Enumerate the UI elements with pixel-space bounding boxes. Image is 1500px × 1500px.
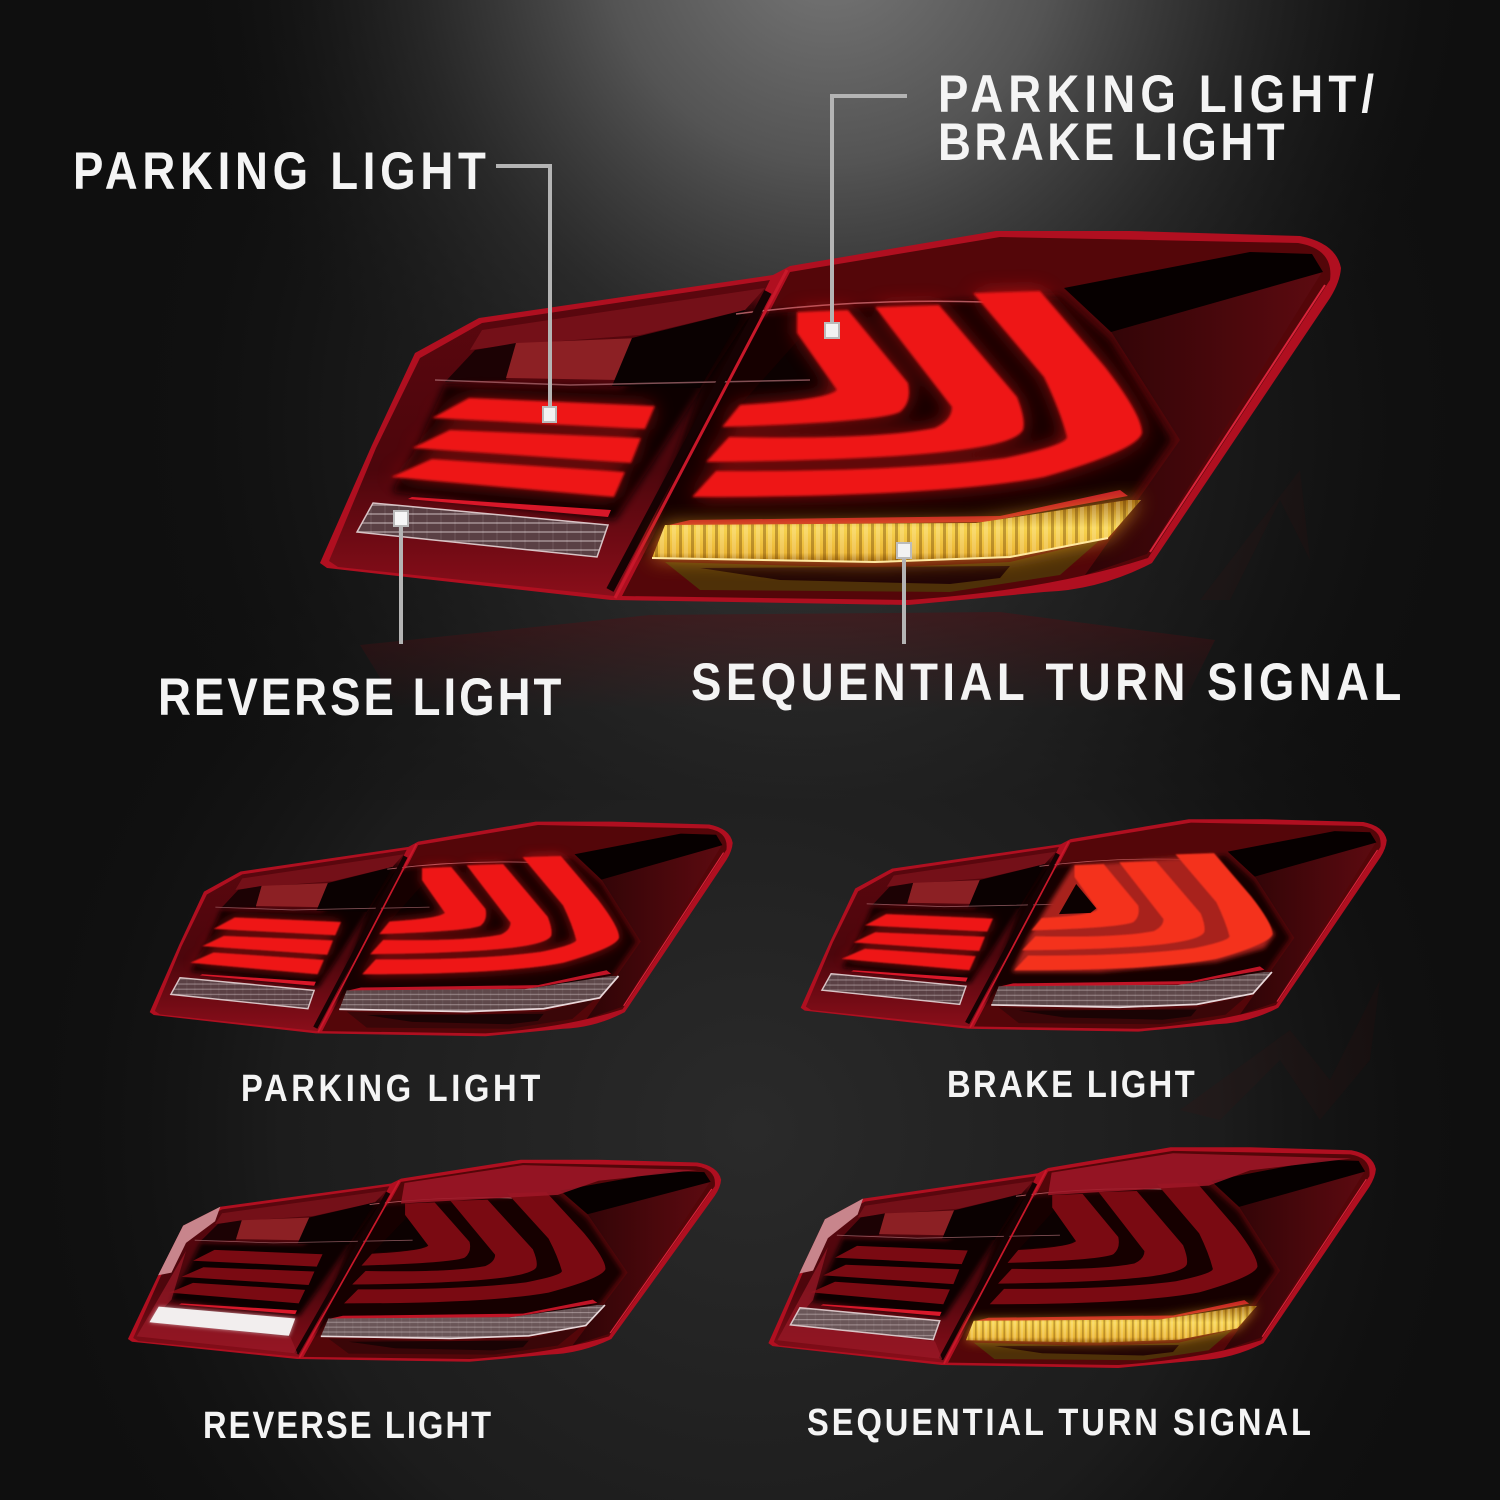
callout: parking / brake light: BRAKE LIGHT (938, 113, 1285, 172)
callout: parking / brake light (825, 65, 1374, 338)
label: parking light: PARKING LIGHT (241, 1067, 541, 1110)
callout: reverse light (158, 511, 561, 727)
main tail light assembly (320, 231, 1341, 605)
panel: sequential turn signal state (768, 1147, 1376, 1444)
turn signal lens (652, 500, 1141, 562)
callout: parking light (73, 142, 556, 422)
callout: sequential turn signal: SEQUENTIAL TURN SIGNAL (691, 653, 1401, 712)
label: reverse light: REVERSE LIGHT (203, 1404, 491, 1447)
callout: parking light: PARKING LIGHT (73, 142, 486, 201)
panel: reverse light state (128, 1160, 721, 1447)
reverse lens (357, 503, 608, 557)
main tail light reflection (360, 612, 1215, 710)
label: brake light: BRAKE LIGHT (947, 1063, 1195, 1106)
callout: parking / brake light: PARKING LIGHT/ (938, 65, 1374, 124)
callout: sequential turn signal (691, 543, 1401, 712)
panel: brake light state (801, 819, 1387, 1106)
callout: reverse light: REVERSE LIGHT (158, 668, 561, 727)
label: sequential turn signal: SEQUENTIAL TURN SIGNAL (807, 1401, 1311, 1444)
panel: parking light state (150, 822, 733, 1110)
